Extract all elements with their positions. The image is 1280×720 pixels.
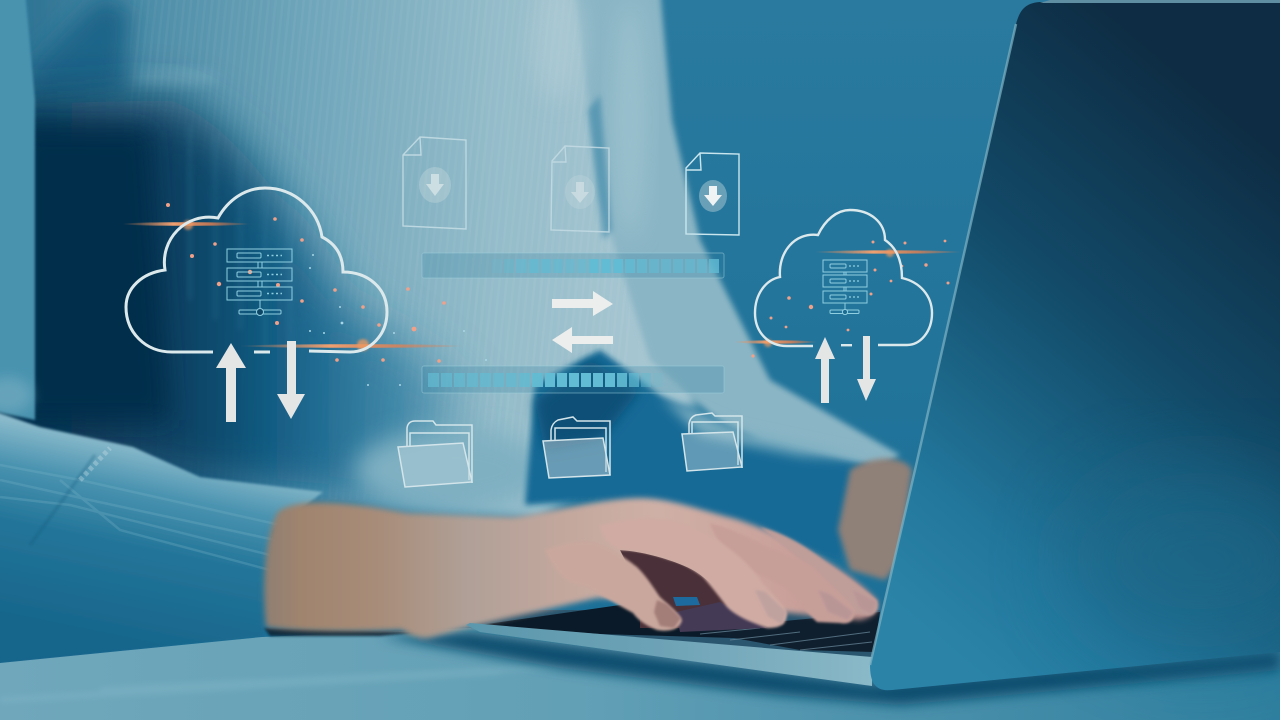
document download icons — [403, 137, 739, 235]
laptop shadow on table — [380, 632, 1280, 705]
table — [0, 628, 1280, 720]
cloud dash — [254, 350, 270, 354]
laptop glow under palm — [673, 597, 700, 606]
palm and back of hand — [264, 498, 878, 638]
document 1 — [403, 137, 466, 229]
fingernails — [654, 600, 681, 628]
sparks left — [122, 203, 487, 386]
sweater torso — [20, 0, 700, 520]
shadow beneath wrist — [264, 628, 420, 636]
sparks right — [733, 240, 962, 358]
folder icons — [398, 413, 742, 487]
cloud outline — [126, 188, 387, 352]
folder 3 — [682, 413, 742, 471]
keyboard — [690, 612, 880, 652]
folder 1 — [398, 421, 472, 487]
server rack icon — [823, 260, 867, 315]
cloud outline — [755, 210, 932, 346]
left cloud — [126, 188, 387, 422]
transfer arrow left — [552, 327, 613, 353]
arrow down — [857, 336, 876, 401]
laptop screen lid — [870, 0, 1280, 690]
arrow up — [815, 337, 835, 403]
right cloud — [755, 210, 932, 403]
laptop deck — [466, 610, 880, 660]
bottom progress bar — [422, 366, 724, 393]
ring finger — [710, 523, 855, 623]
folder 2 — [543, 417, 610, 478]
document 2 — [551, 146, 609, 232]
middle finger — [600, 518, 787, 628]
left forearm sleeve — [0, 410, 323, 665]
pinky finger — [760, 527, 878, 616]
cloud dash — [841, 344, 852, 346]
purple keyboard reflection — [676, 602, 767, 632]
document 3 — [686, 153, 739, 235]
dark under hand — [480, 605, 800, 640]
top progress bar — [422, 253, 724, 278]
transfer arrow right — [552, 291, 613, 316]
index finger — [545, 541, 682, 631]
arrow down — [277, 341, 305, 419]
forearm in shadow — [525, 350, 880, 560]
far hand — [838, 459, 912, 580]
left upper arm — [0, 0, 35, 420]
arrow up — [216, 343, 246, 422]
sweater shadow behind left cloud — [0, 100, 545, 510]
dark palm gap — [620, 550, 767, 628]
server rack icon — [227, 249, 292, 316]
hand — [264, 498, 878, 638]
right sleeve light streak — [532, 0, 900, 480]
laptop front edge — [466, 623, 872, 686]
